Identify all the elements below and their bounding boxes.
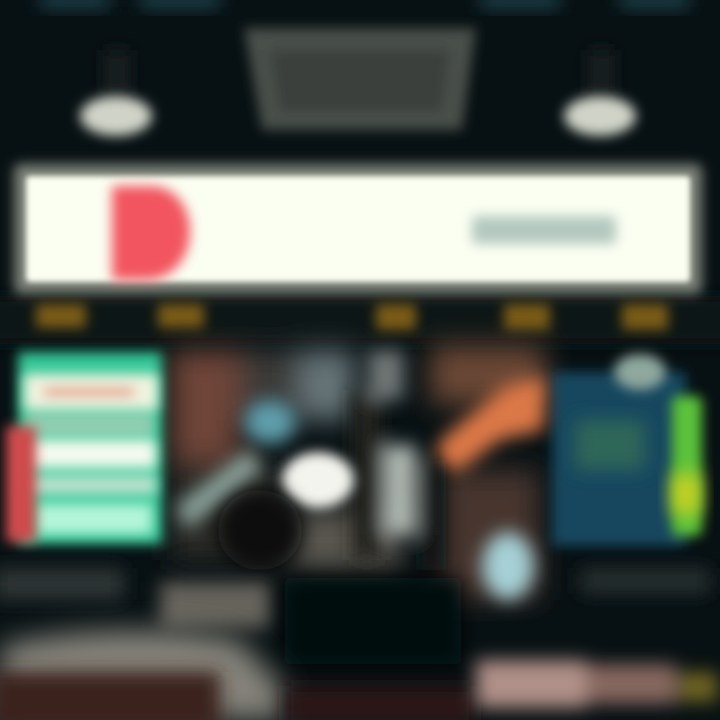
foreground black block [285, 578, 461, 664]
lamp stems [106, 50, 612, 94]
sign logo [112, 186, 190, 280]
left lamp [80, 96, 152, 136]
blue bubble [244, 400, 296, 444]
right display screen [552, 354, 702, 546]
yellow lights row [36, 304, 668, 330]
lower right strip [476, 660, 718, 708]
storefront centre backdrop [170, 345, 545, 600]
ceiling panel [244, 28, 476, 130]
right lamp [564, 96, 636, 136]
right counter [580, 568, 710, 594]
dark storefront band [0, 296, 720, 344]
foreground person head [218, 490, 302, 570]
light blue bubble [482, 532, 534, 600]
seat base [0, 672, 220, 720]
left display screen [6, 352, 162, 544]
foreground seat [0, 630, 285, 720]
white box [282, 452, 354, 508]
ceiling lamps [80, 50, 636, 136]
orange figure [436, 376, 545, 472]
sign banner [14, 164, 702, 294]
left counter [0, 568, 270, 628]
centre figures [352, 350, 440, 570]
diagonal arm [176, 448, 262, 530]
green bar [672, 396, 702, 536]
lower centre strip [285, 686, 475, 720]
red side panel [6, 426, 36, 542]
top edge lights [40, 0, 690, 8]
sign text block [472, 216, 616, 244]
